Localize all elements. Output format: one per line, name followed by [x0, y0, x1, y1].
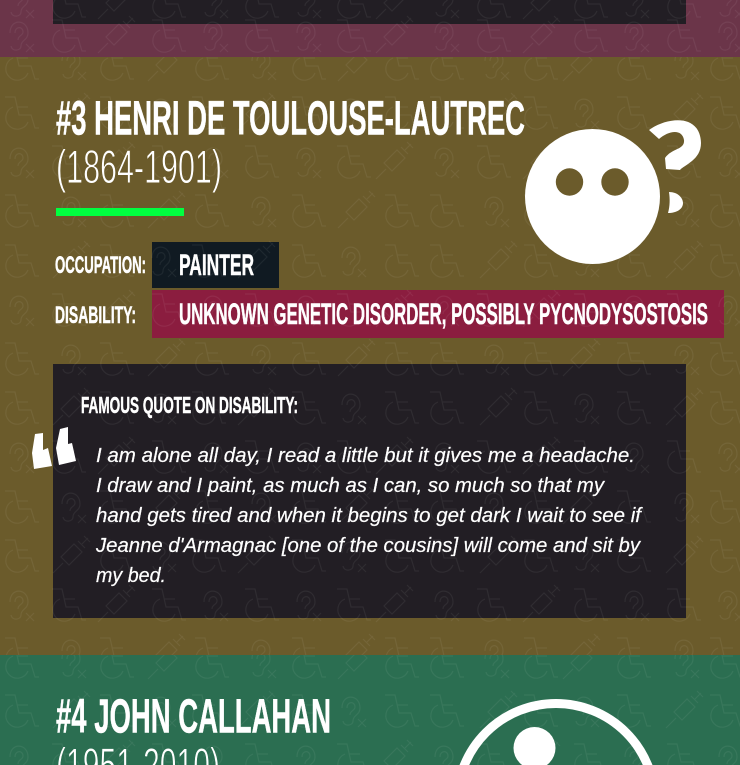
panel: olive section — [0, 57, 740, 655]
accent bar — [56, 208, 184, 216]
label: disability: DISABILITY: — [55, 302, 136, 329]
quote text: hand gets tired and when it begins to get dark I wait to see if — [96, 505, 643, 527]
label: occupation: OCCUPATION: — [55, 252, 146, 279]
quote text: Jeanne d'Armagnac [one of the cousins] will come and sit by — [95, 535, 641, 557]
icon: quotation mark — [32, 427, 76, 469]
icon: person in ring — [457, 704, 655, 765]
heading: dates: (1864-1901) — [56, 140, 222, 193]
panel: maroon section — [0, 0, 740, 57]
panel: green section — [0, 655, 740, 765]
quote text: my bed. — [96, 565, 166, 587]
occupation value box — [152, 242, 279, 288]
quote text: I am alone all day, I read a little but it gives me a headache. — [96, 445, 635, 467]
quote text — [95, 445, 643, 587]
quote heading: FAMOUS QUOTE ON DISABILITY: — [81, 392, 298, 418]
panel: quote box — [53, 364, 686, 618]
heading: next name: #4 JOHN CALLAHAN — [56, 690, 331, 744]
icon: confused face — [525, 120, 701, 264]
quote text: I draw and I paint, as much as I can, so much so that my — [96, 475, 605, 497]
value: painter: PAINTER — [179, 249, 254, 282]
panel: previous quote box — [53, 0, 686, 24]
disability value box — [152, 290, 724, 338]
